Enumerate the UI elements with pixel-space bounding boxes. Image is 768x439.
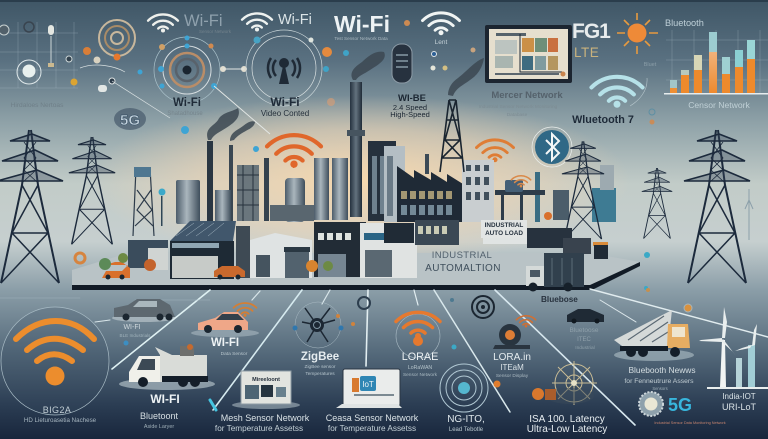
label: Wi-Fi video: Wi-Fi xyxy=(270,95,300,109)
panel: Wi-Fi access point one xyxy=(138,12,270,152)
icon: 5G badge xyxy=(114,108,146,130)
smoke plumes xyxy=(207,52,484,141)
power tower: far left xyxy=(0,130,63,283)
panel: Wi-BE: Lent xyxy=(435,39,448,46)
comms tower: right lattice xyxy=(562,141,604,239)
label: mercer network: Mercer Network xyxy=(491,90,563,101)
nodes: scattered signal nodes xyxy=(450,109,692,312)
icon: wifi grey xyxy=(148,14,178,33)
heading: Wi-Fi two: Wi-Fi xyxy=(278,12,312,28)
icon: concentric target xyxy=(99,20,135,56)
panel: LoRaE: LORAE xyxy=(402,351,438,363)
lattice stack xyxy=(440,100,464,172)
panel: Bluebose xyxy=(541,295,604,351)
panel: ISA 100 wheel xyxy=(527,361,607,435)
panel: 5G and LTE xyxy=(572,13,658,108)
panel: mesh sensor network: Mireeloont xyxy=(252,377,280,383)
sign: industrial xyxy=(481,220,527,238)
panel: Bluebose: Bluetoose xyxy=(570,327,599,334)
panel: ZigBee drone: ZigBee sensor xyxy=(305,364,336,370)
panel: Bluebose: Bluebose xyxy=(541,295,578,304)
panel: white truck Wi-Fi Bluetooth xyxy=(119,344,215,430)
comms tower: left small xyxy=(133,167,166,236)
bar chart xyxy=(664,18,768,110)
panel: white truck Wi-Fi Bluetooth: Aside Laryer xyxy=(144,424,174,430)
panel: sensor network tablet: Database xyxy=(507,112,528,118)
ground and factory front: AUTOMALTION xyxy=(425,263,501,274)
panel: mesh sensor network: for Temperature Assetss xyxy=(215,424,303,433)
power tower: left xyxy=(69,137,115,244)
panel: sensor network tablet: Industrial Sensor Network Monitoring xyxy=(479,104,558,110)
label: Bluetooth: Bluetoont xyxy=(140,411,179,421)
icon: 5G badge: 5G xyxy=(120,112,140,129)
panel: grey car Wi-Fi xyxy=(112,299,176,346)
panel: Bluetooth dump truck: for Fenneutrure Assers xyxy=(624,378,694,385)
label: 5G: 5G xyxy=(668,395,692,415)
panel: pink car Wi-Fi: Data Sensor xyxy=(221,351,248,357)
panel: grey car Wi-Fi: WI-FI xyxy=(123,324,141,331)
panel: pink car Wi-Fi xyxy=(191,303,259,357)
panel: Bluebose: ITEC xyxy=(577,337,591,343)
power tower: right xyxy=(684,130,750,283)
panel: 5G and LTE: Bluet xyxy=(644,62,657,68)
heading: bluetooth: Bluetooth xyxy=(665,18,704,28)
label: Wluetooth 7: Wluetooth 7 xyxy=(572,114,634,126)
icon: bluetooth badge xyxy=(532,127,572,167)
panel: ISA 100 wheel: Ultra-Low Latency xyxy=(527,424,607,435)
central tower with orange wifi xyxy=(267,135,321,168)
sign: industrial: AUTO LOAD xyxy=(485,230,523,237)
label: Wi-Fi truck: WI-FI xyxy=(150,392,180,406)
icon: big orange wifi xyxy=(16,321,94,361)
panel: target and LoRa gear: ITEaM xyxy=(500,363,524,372)
panel: big wifi signal xyxy=(1,307,109,424)
heading: main Wi-Fi: Wi-Fi xyxy=(334,11,390,37)
solar roof building xyxy=(170,221,236,279)
panel: sensor network tablet xyxy=(470,25,572,118)
panel: big wifi signal: HD Lieturoasetia Nachese xyxy=(24,417,97,424)
label: ceasa sensor: Ceasa Sensor Network xyxy=(326,413,419,423)
panel: NG-ITO xyxy=(440,344,500,433)
label: ZigBee: ZigBee xyxy=(301,351,339,363)
factory skyline xyxy=(176,52,616,224)
panel: Wi-Fi access point one: Shatadhouse xyxy=(167,111,203,117)
panel: ceasa sensor network laptop xyxy=(326,297,419,433)
panel: Bluetooth dump truck: Sensors xyxy=(652,386,668,391)
panel: Wi-BE: 2.4 Speed xyxy=(393,103,427,112)
panel: pink car Wi-Fi: WI-FI xyxy=(211,337,239,349)
panel: mesh sensor network xyxy=(215,371,310,433)
panel: wind turbines: URI-LoT xyxy=(722,402,756,412)
label: Wi-Fi: Wi-Fi xyxy=(173,97,201,109)
label: wireless network: Hirdaloes Nertoas xyxy=(11,102,64,109)
icon: wifi light blue xyxy=(591,77,643,108)
label: India-IOT: India-IOT xyxy=(722,392,756,401)
sign: industrial: INDUSTRIAL xyxy=(485,222,523,229)
panel: ZigBee drone xyxy=(292,302,355,377)
panel: NG-ITO: Lead Tebotle xyxy=(449,427,484,433)
panel: 5G badge bottom: Industrial Sensor Data Monitoring Network xyxy=(654,421,726,425)
label: Bluetooth news: Bluebooth Newws xyxy=(628,365,696,375)
dark buildings xyxy=(368,141,396,221)
label: ISA 100: ISA 100. Latency xyxy=(529,414,605,425)
label: NG-ITO: NG-ITO, xyxy=(447,414,485,425)
panel: wireless network schematic, top left xyxy=(0,20,170,118)
label: Wi-BE: WI-BE xyxy=(398,93,426,104)
panel: 5G badge bottom xyxy=(639,392,726,425)
road lines xyxy=(0,289,768,425)
label: mesh sensor: Mesh Sensor Network xyxy=(221,413,310,423)
heading: Wi-Fi: Wi-Fi xyxy=(184,12,222,30)
orange cars xyxy=(102,262,130,278)
caption: main Wi-Fi: Test Sensor Network Data xyxy=(334,36,388,41)
label: LTE: LTE xyxy=(574,45,599,60)
panel: LoRaE: Sensor Network xyxy=(403,372,438,378)
heading: 5G: FG1 xyxy=(572,20,611,43)
tanks and stacks xyxy=(207,141,213,221)
panel: ceasa sensor network laptop: IoT xyxy=(362,380,374,389)
panel: wind turbines xyxy=(699,307,768,412)
panel: Wi-Fi access point one: Sensor Network xyxy=(199,29,232,34)
power tower: right small xyxy=(642,168,672,239)
panel: Bluebose: Industrial xyxy=(575,345,595,351)
icon: wifi white right xyxy=(423,13,459,35)
panel: Wi-BE xyxy=(390,13,459,119)
label: censor network: Censor Network xyxy=(688,100,751,110)
icon: sun xyxy=(617,13,658,54)
panel: ZigBee drone: Temperatures xyxy=(305,371,335,377)
wind turbine silhouette xyxy=(745,189,753,240)
panel: target and LoRa gear xyxy=(472,296,536,379)
label: BIG2A: BIG2A xyxy=(43,405,71,415)
panel: ceasa sensor network laptop: for Temperature Assetss xyxy=(328,424,416,433)
panel: LoRaE xyxy=(396,312,440,378)
panel: grey car Wi-Fi: BLE Industrials xyxy=(120,333,151,338)
dump truck xyxy=(526,253,584,292)
right side plant xyxy=(535,172,540,222)
panel: target and LoRa gear: Sensor Display xyxy=(496,373,529,379)
label: industrial automation: INDUSTRIAL xyxy=(432,250,492,261)
icon: wifi white xyxy=(242,13,272,32)
panel: Wi-BE: High-Speed xyxy=(390,110,430,119)
icon: small wifi orange xyxy=(477,140,513,162)
panel: LoRaE: LoRaWAN xyxy=(408,365,432,371)
panel: Wi-Fi video connect: Video Conted xyxy=(261,109,309,118)
panel: Wi-Fi video connect xyxy=(242,12,349,118)
label: LoRa.in: LORA.in xyxy=(493,352,531,363)
panel: Bluetooth dump truck xyxy=(614,310,696,391)
ground and factory front xyxy=(72,220,650,292)
